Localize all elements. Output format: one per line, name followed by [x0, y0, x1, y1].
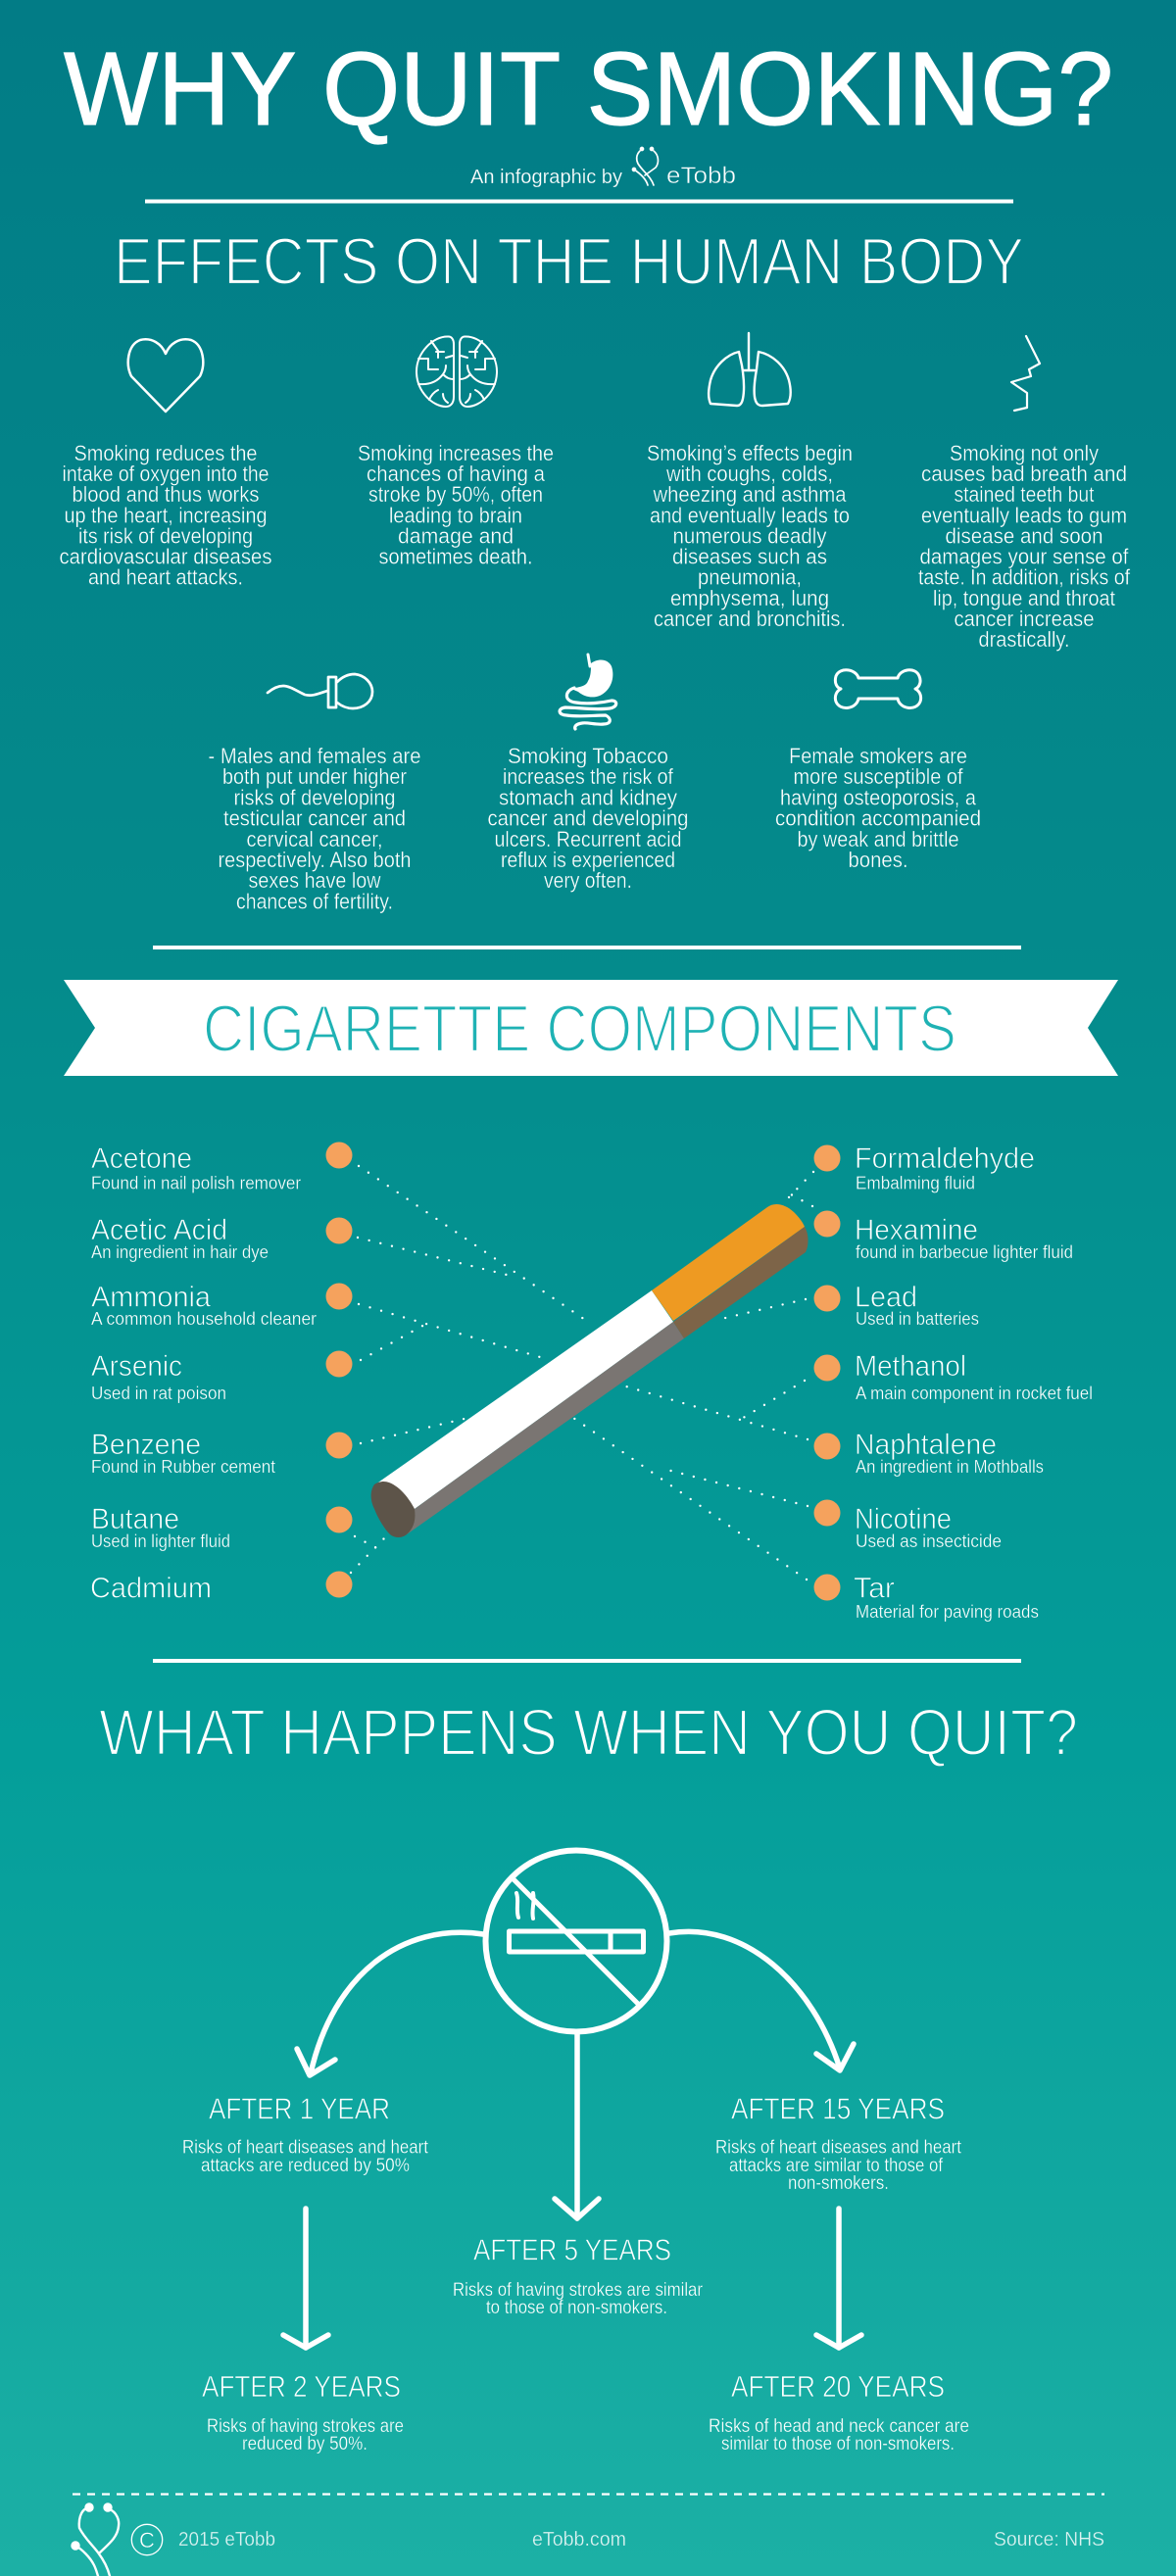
text: reproductive effect: testicular cancer and	[223, 805, 406, 831]
component: lead	[813, 1282, 979, 1329]
icon: sperm	[268, 674, 372, 708]
milestone: after 20 years: similar to those of non-smokers.	[721, 2434, 955, 2454]
component: ammonia: Ammonia	[91, 1282, 211, 1313]
panel: lungs effect	[647, 333, 853, 631]
component: arsenic: Used in rat poison	[91, 1383, 226, 1403]
milestone: after 15 years: attacks are similar to those of	[729, 2156, 944, 2176]
component: methanol: A main component in rocket fuel	[856, 1383, 1093, 1403]
component: tar: Tar	[854, 1572, 895, 1605]
footer	[73, 2504, 1104, 2576]
component: hexamine: Hexamine	[855, 1214, 978, 1246]
text: lungs effect: with coughs, colds,	[665, 462, 833, 486]
panel: brain effect	[358, 336, 554, 568]
copyright: 2015 eTobb	[178, 2529, 275, 2551]
text: reproductive effect: both put under higher	[222, 764, 407, 789]
text: reproductive effect: cervical cancer,	[247, 827, 382, 851]
text: reproductive effect: - Males and females are	[208, 744, 421, 768]
text: heart effect: Smoking reduces the	[74, 441, 257, 465]
text: bone effect: more susceptible of	[794, 764, 963, 789]
component: butane: Used in lighter fluid	[91, 1531, 230, 1551]
arrow: to after 15 years	[669, 1931, 854, 2070]
text: lungs effect: diseases such as	[672, 545, 827, 568]
milestone: after 20 years: Risks of head and neck cancer are	[709, 2416, 969, 2437]
component: formaldehyde: Embalming fluid	[856, 1172, 975, 1193]
milestone: after 2 years: Risks of having strokes are	[207, 2416, 404, 2437]
text: bone effect: having osteoporosis, a	[780, 786, 977, 809]
text: lungs effect: Smoking’s effects begin	[647, 441, 853, 465]
chart: illustrated cigarette	[371, 1204, 808, 1537]
component: naphtalene: Naphtalene	[855, 1429, 997, 1461]
text: brain effect: chances of having a	[367, 462, 546, 486]
source: Source: NHS	[994, 2529, 1104, 2551]
component: acetone: Acetone	[91, 1142, 192, 1175]
component: formaldehyde	[813, 1142, 1035, 1193]
component: ammonia: A common household cleaner	[91, 1308, 317, 1329]
text: brain effect: Smoking increases the	[358, 441, 554, 465]
left component list	[90, 1142, 353, 1605]
component: arsenic: Arsenic	[91, 1350, 182, 1383]
component: methanol: Methanol	[855, 1350, 966, 1383]
text: reproductive effect	[208, 744, 421, 913]
arrow: to after 5 years	[555, 2034, 599, 2218]
milestone: after 5 years: to those of non-smokers.	[486, 2298, 667, 2318]
byline: an infographic by eTobb: eTobb	[666, 163, 736, 189]
text: mouth effect: disease and soon	[945, 523, 1103, 549]
milestone: after 2 years: reduced by 50%.	[242, 2434, 368, 2454]
component: naphtalene	[813, 1429, 1044, 1477]
icon: footer stethoscope logo	[73, 2504, 119, 2576]
text: mouth effect: cancer increase	[955, 607, 1094, 631]
text: brain effect: damage and	[398, 523, 514, 549]
text: lungs effect: pneumonia,	[698, 564, 802, 590]
component: tar: Material for paving roads	[856, 1601, 1039, 1622]
byline: an infographic by eTobb	[470, 147, 736, 189]
panel: bone effect	[775, 670, 981, 872]
text: brain effect: sometimes death.	[378, 545, 533, 568]
text: mouth effect: damages your sense of	[919, 545, 1129, 568]
component: benzene	[91, 1429, 353, 1477]
byline: an infographic by eTobb: An infographic by	[470, 167, 622, 188]
text: lungs effect: numerous deadly	[672, 523, 827, 549]
heading: cigarette components: CIGARETTE COMPONENTS	[203, 992, 956, 1066]
icon: lungs	[709, 333, 791, 406]
text: heart effect: its risk of developing	[78, 523, 253, 549]
arrow: to after 1 year	[297, 1932, 483, 2075]
text: stomach effect: increases the risk of	[503, 764, 674, 789]
text: heart effect	[59, 441, 272, 590]
milestone: after 20 years	[709, 2369, 969, 2454]
milestone: after 5 years	[453, 2232, 704, 2318]
milestone: after 2 years	[202, 2369, 404, 2454]
text: stomach effect	[488, 744, 688, 893]
right component list	[813, 1142, 1093, 1622]
arrow: to after 2 years	[283, 2209, 328, 2348]
component: butane: Butane	[91, 1503, 179, 1535]
component: benzene: Benzene	[91, 1429, 201, 1461]
text: brain effect: leading to brain	[389, 504, 522, 527]
milestone: after 20 years: AFTER 20 YEARS	[731, 2369, 945, 2404]
copyright: C	[139, 2528, 155, 2552]
panel: heart effect	[59, 339, 272, 590]
text: stomach effect: ulcers. Recurrent acid	[494, 827, 682, 851]
text: mouth effect: drastically.	[978, 627, 1070, 652]
text: bone effect: condition accompanied	[775, 805, 981, 831]
component: nicotine	[813, 1499, 1002, 1551]
text: brain effect	[358, 441, 554, 568]
text: lungs effect: and eventually leads to	[650, 504, 850, 527]
panel: mouth effect	[918, 336, 1131, 652]
component: formaldehyde: Formaldehyde	[855, 1142, 1035, 1175]
component: acetone	[91, 1142, 353, 1193]
text: stomach effect: stomach and kidney	[499, 786, 677, 809]
copyright	[131, 2524, 275, 2555]
component: hexamine: found in barbecue lighter fluid	[856, 1241, 1073, 1262]
ribbon: cigarette components	[64, 980, 1118, 1076]
text: heart effect: and heart attacks.	[88, 564, 243, 590]
icon: mouth profile	[1011, 336, 1040, 411]
milestone: after 2 years: AFTER 2 YEARS	[202, 2369, 401, 2404]
component: cadmium: Cadmium	[90, 1572, 212, 1605]
milestone: after 15 years: AFTER 15 YEARS	[731, 2091, 945, 2126]
text: reproductive effect: sexes have low	[249, 868, 381, 893]
text: bone effect: bones.	[849, 848, 907, 872]
component: methanol	[813, 1350, 1093, 1403]
component: acetic acid	[91, 1214, 353, 1262]
icon: heart	[128, 339, 203, 412]
component: tar	[813, 1572, 1039, 1622]
milestone: after 15 years	[715, 2091, 962, 2194]
component: acetic acid: An ingredient in hair dye	[91, 1241, 269, 1262]
component: lead: Lead	[855, 1282, 917, 1313]
icon: stomach and intestines	[560, 655, 616, 729]
heading: effects on the human body: EFFECTS ON THE HUMAN BODY	[114, 224, 1024, 299]
heading: what happens when you quit: WHAT HAPPENS WHEN YOU QUIT?	[99, 1696, 1078, 1770]
text: reproductive effect: risks of developing	[233, 786, 396, 809]
component: naphtalene: An ingredient in Mothballs	[856, 1456, 1044, 1477]
text: bone effect: Female smokers are	[789, 744, 967, 768]
text: lungs effect	[647, 441, 853, 631]
component: lead: Used in batteries	[856, 1308, 979, 1329]
arrow: to after 20 years	[816, 2209, 861, 2348]
text: mouth effect: lip, tongue and throat	[933, 586, 1115, 610]
component: ammonia	[91, 1282, 353, 1329]
component: butane	[91, 1503, 353, 1551]
text: heart effect: cardiovascular diseases	[59, 545, 272, 568]
text: stomach effect: Smoking Tobacco	[508, 744, 668, 768]
text: lungs effect: emphysema, lung	[670, 586, 829, 610]
milestone: after 1 year: AFTER 1 YEAR	[209, 2091, 390, 2126]
text: mouth effect: Smoking not only	[950, 441, 1099, 465]
text: mouth effect: eventually leads to gum	[921, 504, 1127, 527]
text: heart effect: intake of oxygen into the	[63, 462, 269, 486]
icon: stethoscope logo	[633, 147, 658, 185]
component: arsenic	[91, 1350, 353, 1403]
text: heart effect: blood and thus works	[73, 482, 259, 507]
text: reproductive effect: chances of fertility.	[236, 890, 393, 913]
milestone: after 1 year: Risks of heart diseases and heart	[182, 2138, 429, 2158]
dotted connector lines	[351, 1166, 813, 1580]
text: heart effect: up the heart, increasing	[65, 504, 267, 527]
milestone: after 5 years: Risks of having strokes are similar	[453, 2280, 704, 2301]
milestone: after 15 years: non-smokers.	[788, 2173, 889, 2194]
panel: stomach effect	[488, 655, 688, 893]
text: stomach effect: cancer and developing	[488, 805, 688, 831]
text: mouth effect: taste. In addition, risks of	[918, 564, 1131, 590]
title: WHY QUIT SMOKING?	[64, 31, 1113, 147]
text: mouth effect	[918, 441, 1131, 652]
text: lungs effect: wheezing and asthma	[653, 482, 847, 507]
component: nicotine: Used as insecticide	[856, 1531, 1002, 1551]
icon: no smoking sign	[486, 1850, 666, 2032]
text: mouth effect: causes bad breath and	[921, 462, 1127, 486]
icon: brain	[416, 336, 497, 407]
text: brain effect: stroke by 50%, often	[368, 482, 543, 507]
text: stomach effect: reflux is experienced	[501, 848, 675, 872]
component: cadmium	[90, 1572, 353, 1605]
component: benzene: Found in Rubber cement	[91, 1456, 275, 1477]
text: lungs effect: cancer and bronchitis.	[654, 607, 846, 631]
milestone: after 1 year: attacks are reduced by 50%	[201, 2156, 410, 2176]
milestone: after 5 years: AFTER 5 YEARS	[473, 2232, 671, 2267]
component: nicotine: Nicotine	[855, 1503, 952, 1535]
text: stomach effect: very often.	[544, 868, 632, 893]
component: acetic acid: Acetic Acid	[91, 1214, 227, 1246]
component: acetone: Found in nail polish remover	[91, 1172, 301, 1193]
panel: reproductive effect	[208, 674, 421, 913]
text: bone effect	[775, 744, 981, 872]
component: hexamine	[813, 1211, 1073, 1262]
text: bone effect: by weak and brittle	[798, 827, 958, 851]
website: eTobb.com	[532, 2529, 626, 2551]
text: mouth effect: stained teeth but	[955, 482, 1094, 507]
milestone: after 1 year	[182, 2091, 429, 2176]
milestone: after 15 years: Risks of heart diseases and heart	[715, 2138, 962, 2158]
icon: bone	[835, 670, 921, 707]
text: reproductive effect: respectively. Also both	[218, 848, 412, 872]
